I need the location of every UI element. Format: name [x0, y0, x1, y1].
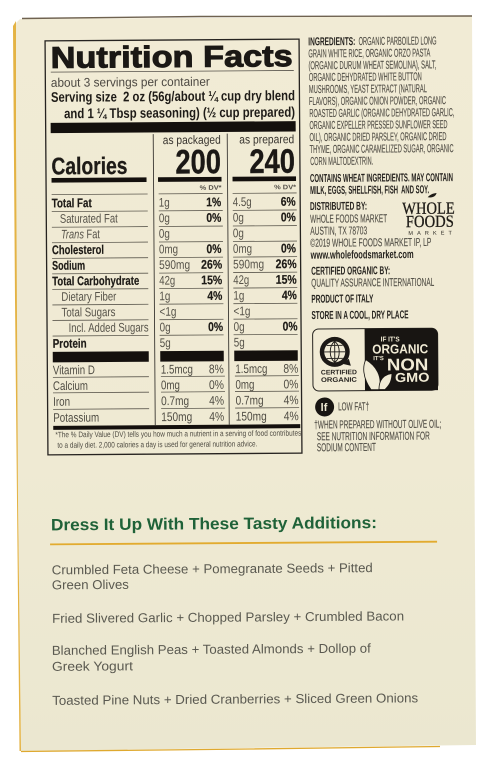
- ingredients text: [308, 35, 455, 168]
- row: total fat: 4.5g: [233, 195, 252, 209]
- row: potassium: [53, 409, 299, 425]
- whole foods logo: MARKET: [408, 231, 453, 237]
- additions list: Crumbled Feta Cheese + Pomegranate Seeds + Pitted: [52, 560, 373, 577]
- additions heading: Dress It Up With These Tasty Additions:: [51, 514, 377, 534]
- row: sodium: 590mg: [233, 257, 264, 271]
- row: total fat: 1%: [206, 195, 221, 209]
- servings text: about 3 servings per container: [51, 75, 210, 90]
- row: total fat: 6%: [281, 195, 296, 209]
- row: added sugars: 0%: [283, 319, 298, 334]
- row: potassium: Potassium: [53, 411, 99, 425]
- as packaged calories: 200: [175, 143, 221, 181]
- row: potassium: 4%: [284, 409, 299, 423]
- organic non gmo badge: ORGANIC: [372, 341, 429, 357]
- organic non gmo badge: CERTIFIED: [321, 369, 357, 376]
- daily value header: [200, 184, 297, 192]
- row: total fat: [52, 195, 296, 210]
- low fat icon: lf: [321, 402, 328, 414]
- icon: qai globe: [320, 337, 351, 367]
- row: saturated fat: 0g: [159, 211, 170, 225]
- row: potassium: 150mg: [236, 409, 267, 424]
- row: trans fat: 0g: [233, 226, 244, 240]
- as packaged calories: as packaged: [163, 133, 221, 147]
- storage statement: STORE IN A COOL, DRY PLACE: [311, 309, 409, 322]
- row: dietary fiber: 4%: [282, 288, 297, 302]
- row: cholesterol: 0%: [206, 242, 222, 256]
- icon: leaves: [364, 359, 392, 390]
- allergen statement: [310, 172, 453, 197]
- row: total sugars: <1g: [159, 305, 177, 319]
- daily value header: % DV*: [274, 184, 297, 191]
- row: vitamin d: 8%: [209, 362, 224, 376]
- ingredients text: INGREDIENTS:: [308, 36, 355, 48]
- distributor block: www.wholefoodsmarket.com: [310, 249, 414, 262]
- row: cholesterol: 0%: [281, 241, 296, 256]
- low fat footnote: SODIUM CONTENT: [317, 442, 376, 454]
- whole foods logo: WHOLE: [402, 199, 455, 218]
- row: iron: 0.7mg: [161, 394, 189, 408]
- row: sodium: Sodium: [52, 259, 85, 273]
- row: iron: [53, 393, 299, 409]
- calories label: Calories: [51, 153, 128, 180]
- row: calcium: Calcium: [53, 379, 88, 393]
- row: total carbohydrate: 42g: [159, 273, 175, 288]
- row: total carbohydrate: [52, 273, 297, 288]
- row: cholesterol: 0mg: [159, 242, 178, 256]
- nutrition title: Nutrition Facts: [51, 40, 293, 75]
- row: dietary fiber: 4%: [207, 289, 222, 303]
- serving size: Serving size 2 oz (56g/about ¼ cup dry blend: [51, 87, 295, 105]
- row: calcium: 0%: [209, 378, 224, 392]
- row: added sugars: 0g: [234, 320, 245, 334]
- row: saturated fat: [60, 210, 296, 226]
- organic non gmo badge: ORGANIC: [321, 377, 357, 384]
- row: trans fat: [61, 226, 244, 241]
- row: cholesterol: Cholesterol: [52, 243, 104, 257]
- row: saturated fat: 0g: [233, 211, 244, 225]
- footnote: [55, 429, 301, 450]
- row: saturated fat: 0%: [281, 210, 296, 224]
- row: total carbohydrate: Total Carbohydrate: [52, 274, 139, 288]
- row: dietary fiber: [61, 288, 297, 304]
- row: dietary fiber: Dietary Fiber: [61, 290, 116, 304]
- organic non gmo badge: NON: [387, 355, 428, 375]
- row: dietary fiber: 1g: [233, 289, 244, 303]
- organic non gmo badge: IT'S: [373, 356, 384, 362]
- row: protein: [53, 335, 245, 351]
- row: iron: 0.7mg: [236, 393, 264, 408]
- row: potassium: 4%: [209, 410, 224, 424]
- row: saturated fat: 0%: [206, 211, 221, 225]
- low fat label: LOW FAT†: [338, 401, 369, 413]
- row: total sugars: <1g: [233, 304, 251, 318]
- row: protein: 5g: [160, 336, 171, 350]
- row: added sugars: [69, 319, 298, 335]
- row: protein: 5g: [234, 335, 245, 349]
- ingredients text: CORN MALTODEXTRIN.: [310, 156, 373, 168]
- row: calcium: [53, 377, 299, 393]
- row: calcium: 0mg: [235, 378, 255, 392]
- serving size: and 1 ¼ Tbsp seasoning) (½ cup prepared): [64, 104, 295, 121]
- additions list: Blanched English Peas + Toasted Almonds + Dollop of: [52, 641, 371, 658]
- row: vitamin d: Vitamin D: [53, 363, 95, 377]
- certification text: CERTIFIED ORGANIC BY:: [311, 265, 390, 278]
- row: calcium: 0mg: [161, 378, 180, 392]
- low fat footnote: [314, 419, 441, 454]
- distributor block: [310, 200, 432, 262]
- row: total fat: 1g: [159, 196, 170, 210]
- additions list: Green Olives: [52, 577, 129, 592]
- row: dietary fiber: 1g: [159, 289, 170, 303]
- distributor block: DISTRIBUTED BY:: [310, 201, 367, 213]
- row: total carbohydrate: 15%: [276, 273, 297, 287]
- distributor block: WHOLE FOODS MARKET: [310, 213, 387, 226]
- row: vitamin d: 1.5mcg: [235, 362, 267, 376]
- certification text: [311, 265, 435, 290]
- row: iron: 4%: [209, 394, 224, 408]
- row: total carbohydrate: 42g: [233, 273, 249, 287]
- distributor block: AUSTIN, TX 78703: [310, 225, 367, 238]
- organic non gmo badge: GMO: [395, 370, 429, 385]
- footnote: *The % Daily Value (DV) tells you how much a nutrient in a serving of food contributes: [55, 429, 301, 439]
- row: total fat: Total Fat: [52, 196, 92, 210]
- row: sodium: 26%: [201, 258, 222, 272]
- row: vitamin d: [53, 362, 298, 377]
- serving size: [51, 87, 295, 121]
- row: vitamin d: 8%: [283, 362, 298, 376]
- origin statement: PRODUCT OF ITALY: [311, 293, 374, 306]
- row: total sugars: [61, 304, 251, 319]
- organic non gmo badge: IF IT'S: [381, 336, 400, 344]
- row: iron: 4%: [284, 393, 299, 407]
- organic non gmo badge: [313, 328, 438, 391]
- row: trans fat: Trans Fat: [61, 227, 100, 241]
- low fat icon: [315, 397, 334, 417]
- row: added sugars: 0g: [160, 320, 171, 334]
- as prepared calories: 240: [249, 143, 295, 181]
- additions list: [51, 560, 419, 708]
- row: total carbohydrate: 15%: [201, 273, 222, 287]
- additions list: Greek Yogurt: [52, 658, 133, 674]
- row: vitamin d: 1.5mcg: [161, 362, 193, 377]
- additions list: Toasted Pine Nuts + Dried Cranberries + Sliced Green Onions: [52, 690, 419, 708]
- as prepared calories: [239, 132, 295, 181]
- row: potassium: 150mg: [161, 410, 192, 424]
- row: cholesterol: 0mg: [233, 242, 252, 256]
- additions list: Fried Slivered Garlic + Chopped Parsley + Crumbled Bacon: [52, 608, 404, 626]
- row: iron: Iron: [53, 395, 70, 409]
- row: sodium: 26%: [276, 257, 297, 271]
- as prepared calories: as prepared: [239, 132, 294, 147]
- row: calcium: 0%: [283, 377, 299, 391]
- row: cholesterol: [52, 241, 296, 257]
- whole foods logo: FOODS: [406, 212, 454, 231]
- row: sodium: 590mg: [159, 258, 190, 272]
- row: total sugars: Total Sugars: [61, 305, 116, 319]
- whole foods logo: [402, 193, 455, 237]
- row: sodium: [52, 257, 297, 273]
- row: saturated fat: Saturated Fat: [60, 211, 118, 226]
- nutrition facts panel: [45, 39, 302, 455]
- daily value header: % DV*: [200, 185, 222, 192]
- as packaged calories: [163, 133, 221, 182]
- row: trans fat: 0g: [159, 227, 170, 241]
- row: added sugars: Incl. Added Sugars: [69, 320, 149, 335]
- row: protein: Protein: [53, 337, 87, 351]
- footnote: to a daily diet. 2,000 calories a day is used for general nutrition advice.: [57, 439, 257, 450]
- row: added sugars: 0%: [208, 320, 223, 334]
